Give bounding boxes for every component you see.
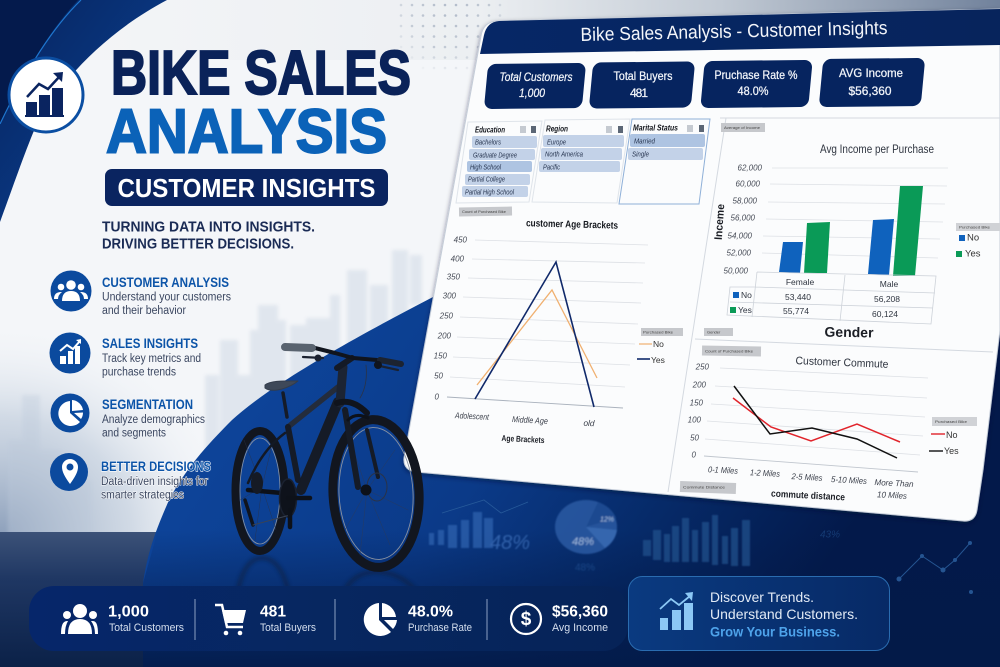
slicer: education: Bachelors bbox=[475, 138, 501, 146]
subtitle pill: CUSTOMER INSIGHTS bbox=[118, 173, 376, 203]
bar chart: average income per purchase: 60,000 bbox=[736, 180, 761, 188]
commute chart legend bbox=[929, 417, 977, 456]
dashboard panel bbox=[404, 9, 1000, 521]
bar chart legend bbox=[956, 223, 1000, 260]
line chart: customer commute: 200 bbox=[692, 380, 707, 390]
bar chart: average income per purchase: Inceme bbox=[713, 204, 727, 240]
slicer: education: High School bbox=[470, 162, 501, 172]
line chart: customer age brackets: 450 bbox=[454, 236, 468, 244]
bar chart: average income per purchase bbox=[704, 123, 1000, 340]
line chart: customer commute: 50 bbox=[690, 434, 700, 442]
title: Analysis: ANALYSIS bbox=[106, 98, 387, 166]
icon: people bbox=[61, 604, 98, 634]
line chart: customer commute: 100 bbox=[688, 416, 702, 424]
KPI card: purchase rate bbox=[700, 60, 813, 108]
commute chart legend: Purchased Bike bbox=[935, 419, 968, 424]
feature: sales insights: SALES INSIGHTS bbox=[102, 335, 198, 351]
feature: better decisions: Data-driven insights for bbox=[101, 476, 208, 488]
data table bbox=[727, 272, 936, 324]
KPI card: total buyers: Total Buyers bbox=[614, 69, 672, 83]
tagline: DRIVING BETTER DECISIONS. bbox=[102, 236, 294, 252]
faint pie chart: 12% bbox=[600, 516, 614, 524]
stat: average income bbox=[511, 604, 608, 634]
line chart: customer age brackets: 400 bbox=[451, 254, 465, 264]
line chart: customer age brackets: old bbox=[583, 418, 595, 428]
stat: total customers bbox=[61, 604, 184, 634]
slicer: education: Graduate Degree bbox=[473, 150, 517, 160]
age chart legend: Purchased Bike bbox=[643, 330, 674, 334]
call to action box: Understand Customers. bbox=[710, 606, 858, 622]
tagline bbox=[102, 218, 315, 252]
faint bars right bbox=[643, 515, 750, 566]
blue swoosh behind bike and dashboard bbox=[143, 297, 1000, 667]
line chart: customer commute: 2-5 Miles bbox=[790, 471, 823, 483]
stat: purchase rate: Purchase Rate bbox=[408, 622, 472, 634]
dot grid decoration bbox=[400, 4, 502, 69]
KPI card: average income: $56,360 bbox=[848, 84, 892, 98]
feature: sales insights: Track key metrics and bbox=[102, 353, 201, 365]
commute chart legend: No bbox=[946, 430, 958, 440]
KPI card: total customers bbox=[484, 63, 586, 109]
line chart: customer age brackets: 150 bbox=[434, 352, 448, 360]
slicer: education bbox=[456, 121, 542, 203]
data table: 56,208 bbox=[874, 294, 900, 304]
drivetrain bbox=[245, 472, 387, 527]
icon: location pin bbox=[50, 453, 88, 491]
bar chart: average income per purchase: Average of Income bbox=[724, 125, 761, 130]
title: Bike Sales: BIKE SALES bbox=[111, 39, 411, 108]
stats bar bbox=[29, 586, 628, 651]
data table: Male bbox=[880, 279, 898, 289]
line chart: customer age brackets bbox=[434, 207, 683, 445]
line chart: customer commute: 10 Miles bbox=[877, 489, 908, 501]
stat: purchase rate bbox=[364, 603, 472, 636]
dashboard header bbox=[480, 9, 1000, 54]
icon: logo chart badge bbox=[9, 58, 83, 132]
handlebar bbox=[285, 347, 401, 398]
bar chart legend: Yes bbox=[965, 248, 981, 260]
bar chart: average income per purchase: Avg Income per Purchase bbox=[820, 144, 934, 156]
faint line charts bbox=[442, 500, 973, 594]
faint bars and 48% bbox=[429, 512, 530, 554]
line chart: customer commute: 0 bbox=[692, 450, 697, 460]
icon: sales chart bbox=[50, 332, 90, 374]
line chart: customer commute: commute distance bbox=[771, 489, 845, 503]
feature: segmentation bbox=[50, 394, 205, 440]
line chart: customer age brackets: 0 bbox=[435, 392, 440, 402]
dashboard header: Bike Sales Analysis - Customer Insights bbox=[580, 18, 888, 46]
commute chart legend: Yes bbox=[944, 446, 959, 456]
call to action box: Discover Trends. bbox=[710, 589, 814, 605]
line chart: customer commute: 5-10 Miles bbox=[831, 474, 868, 486]
feature: customer analysis: and their behavior bbox=[102, 305, 186, 317]
icon: cart bbox=[215, 605, 246, 635]
faint pie chart bbox=[555, 500, 617, 574]
bar chart: average income per purchase: 50,000 bbox=[724, 266, 749, 276]
feature: sales insights: purchase trends bbox=[102, 366, 176, 378]
KPI card: average income bbox=[819, 58, 925, 107]
line chart: customer commute: More Than bbox=[874, 477, 914, 489]
age chart legend: Yes bbox=[651, 355, 665, 365]
slicer: education: Education bbox=[475, 126, 505, 134]
line chart: customer commute: Commute Distance bbox=[683, 484, 726, 490]
slicer: region: Europe bbox=[547, 138, 566, 146]
line chart: customer commute: Customer Commute bbox=[795, 355, 889, 371]
line chart: customer commute: 0-1 Miles bbox=[708, 464, 739, 476]
slicer: region: North America bbox=[545, 150, 583, 158]
dividers bbox=[668, 118, 1000, 492]
line chart: customer age brackets: Middle Age bbox=[512, 414, 548, 426]
bar chart legend: Purchased Bike bbox=[959, 224, 991, 230]
line chart: customer age brackets: 250 bbox=[439, 312, 454, 320]
KPI card: total customers: Total Customers bbox=[500, 70, 572, 84]
saddle bbox=[265, 381, 298, 390]
KPI card: total buyers: 481 bbox=[630, 86, 648, 100]
feature: customer analysis: Understand your customers bbox=[102, 292, 231, 304]
line chart: customer age brackets: customer Age Brackets bbox=[526, 218, 618, 232]
bar chart: average income per purchase: Gender bbox=[707, 330, 721, 334]
faint pie chart: 48% bbox=[575, 562, 595, 574]
data table: 55,774 bbox=[783, 306, 809, 316]
floor left bbox=[0, 532, 260, 667]
bike bbox=[236, 347, 423, 570]
bar chart: average income per purchase: 58,000 bbox=[733, 196, 758, 206]
bar chart: average income per purchase: 62,000 bbox=[738, 164, 763, 172]
feature: segmentation: SEGMENTATION bbox=[102, 396, 193, 412]
stat: average income: $56,360 bbox=[552, 604, 608, 620]
stat: total customers: Total Customers bbox=[109, 622, 184, 634]
call to action box bbox=[628, 576, 890, 650]
KPI card: average income: AVG Income bbox=[839, 66, 903, 80]
slicer: region: Region bbox=[546, 124, 568, 134]
line chart: customer age brackets: Age Brackets bbox=[501, 433, 545, 445]
slicer: education: Partial High School bbox=[465, 188, 514, 196]
stat: total buyers: Total Buyers bbox=[260, 622, 316, 634]
line chart: customer commute bbox=[680, 346, 977, 503]
bar chart: average income per purchase: 54,000 bbox=[728, 232, 753, 240]
top-left corner swoosh bbox=[0, 0, 167, 222]
line chart: customer commute: 250 bbox=[695, 362, 710, 372]
frame bbox=[248, 367, 343, 493]
data table: No bbox=[741, 290, 752, 300]
slicer: marital status: Married bbox=[634, 136, 656, 146]
KPI card: purchase rate: Pruchase Rate % bbox=[714, 68, 798, 82]
bar chart: average income per purchase: 56,000 bbox=[731, 214, 756, 222]
line chart: customer age brackets: 200 bbox=[437, 332, 452, 340]
line chart: customer age brackets: 350 bbox=[447, 272, 461, 282]
data table: 53,440 bbox=[785, 292, 811, 302]
icon: customers bbox=[50, 270, 92, 312]
icon: dollar coin: $ bbox=[521, 609, 532, 630]
call to action box: Grow Your Business. bbox=[710, 624, 840, 640]
fork bbox=[337, 402, 378, 487]
line chart: customer commute: 1-2 Miles bbox=[750, 467, 781, 479]
stat: total buyers bbox=[215, 604, 316, 635]
stat: total customers: 1,000 bbox=[108, 604, 149, 620]
slicer: marital status: Single bbox=[632, 150, 649, 158]
line chart: customer commute: 150 bbox=[690, 398, 704, 408]
feature: better decisions: BETTER DECISIONS bbox=[101, 458, 211, 474]
KPI card: total customers: 1,000 bbox=[519, 86, 545, 100]
front wheel bbox=[329, 417, 423, 570]
rear wheel bbox=[236, 431, 284, 551]
slicer: region bbox=[532, 119, 630, 203]
faint city skyline bbox=[8, 250, 422, 535]
slicer: region: Pacific bbox=[543, 162, 560, 172]
bar chart: average income per purchase: Gender bbox=[824, 324, 874, 340]
slicer: marital status bbox=[619, 119, 710, 204]
tagline: TURNING DATA INTO INSIGHTS. bbox=[102, 218, 315, 236]
slicer: education: Partial College bbox=[468, 174, 505, 184]
data table: Yes bbox=[738, 305, 752, 315]
line chart: customer age brackets: 300 bbox=[443, 292, 457, 300]
line chart: customer age brackets: Adolescent bbox=[454, 410, 490, 422]
feature: better decisions: smarter strategies bbox=[101, 490, 184, 502]
KPI card: purchase rate: 48.0% bbox=[738, 84, 769, 98]
line chart: customer commute: Count of Purchased Bike bbox=[705, 348, 754, 354]
line chart: customer age brackets: 50 bbox=[434, 372, 444, 380]
stat: total buyers: 481 bbox=[260, 604, 286, 620]
age chart legend: No bbox=[653, 339, 664, 349]
feature: segmentation: Analyze demographics bbox=[102, 414, 205, 426]
feature: customer analysis: CUSTOMER ANALYSIS bbox=[102, 274, 229, 290]
stat: purchase rate: 48.0% bbox=[408, 604, 453, 620]
feature: customer analysis bbox=[50, 270, 231, 317]
age chart legend bbox=[637, 328, 683, 365]
icon: pie chart bbox=[50, 394, 90, 432]
icon: pie bbox=[364, 603, 397, 636]
feature: better decisions bbox=[50, 453, 211, 502]
faint pie chart: 48% bbox=[572, 536, 594, 548]
feature: segmentation: and segments bbox=[102, 428, 166, 440]
bar chart legend: No bbox=[967, 232, 979, 244]
KPI card: total buyers bbox=[589, 61, 695, 109]
data table: Female bbox=[786, 277, 814, 287]
line chart: customer age brackets: Count of Purchased Bike bbox=[462, 209, 507, 214]
faint line charts: 43% bbox=[820, 530, 840, 540]
faint bars and 48%: 48% bbox=[490, 532, 530, 554]
stat: average income: Avg Income bbox=[552, 622, 608, 634]
floor reflections of bike bbox=[238, 558, 415, 590]
slicer: marital status: Marital Status bbox=[633, 124, 678, 132]
feature: sales insights bbox=[50, 332, 201, 378]
icon: growth chart bbox=[660, 592, 693, 630]
data table: 60,124 bbox=[872, 309, 898, 319]
bar chart: average income per purchase: 52,000 bbox=[727, 248, 752, 258]
